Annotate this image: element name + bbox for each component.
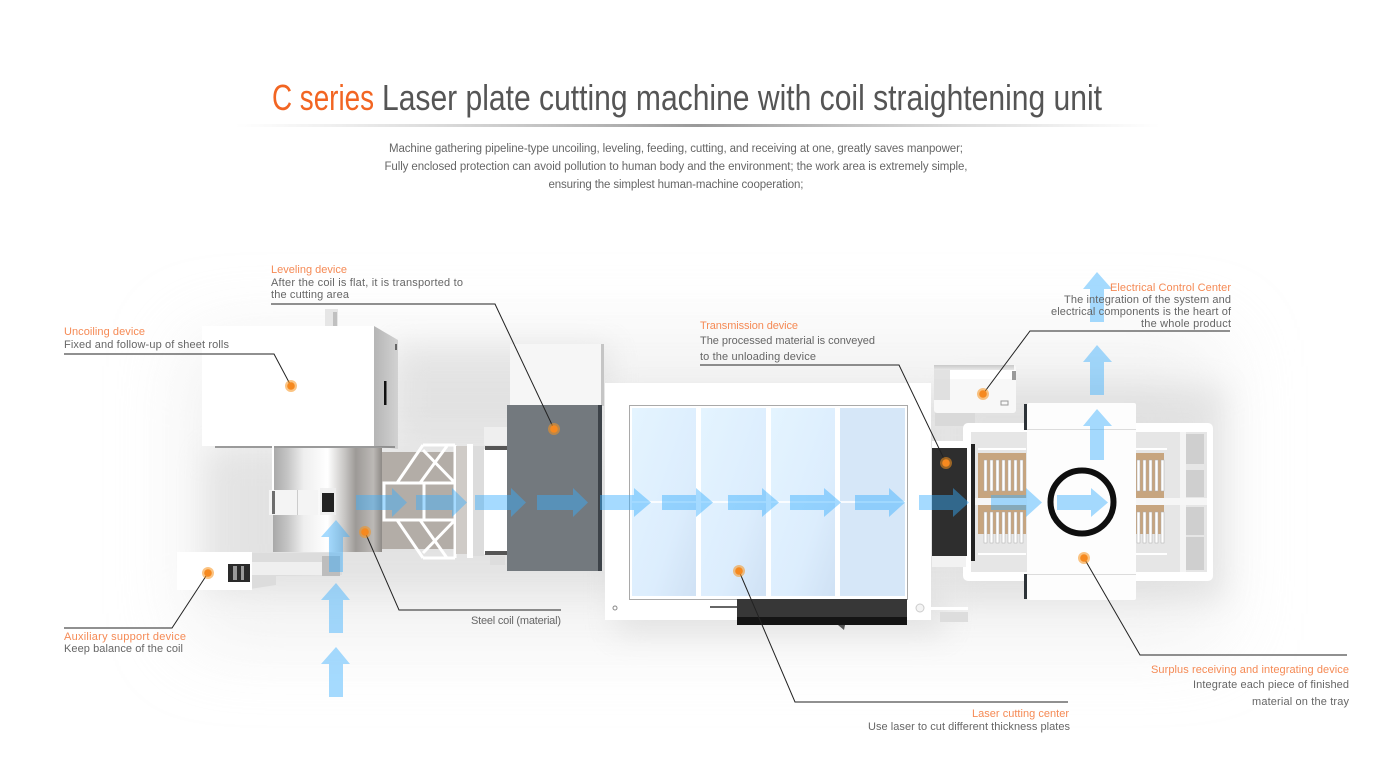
callout: electrical control center: The integration of the system and xyxy=(1064,294,1231,306)
callout: leveling device xyxy=(271,264,463,301)
feed rollers xyxy=(456,427,507,565)
callout: auxiliary support device: Keep balance of the coil xyxy=(64,643,183,655)
horizontal flow arrows xyxy=(356,488,1108,517)
auxiliary support xyxy=(177,552,342,590)
callout: leveling device: Leveling device xyxy=(271,264,347,276)
coil clamp xyxy=(269,446,336,515)
callout: electrical control center: Electrical Control Center xyxy=(1110,282,1231,294)
intro text: ensuring the simplest human-machine cooperation; xyxy=(548,179,804,191)
callout: uncoiling device xyxy=(64,326,230,351)
callout: leveling device: After the coil is flat, it is transported to xyxy=(271,277,463,289)
callout: laser cutting center: Laser cutting center xyxy=(972,708,1069,720)
callout: steel coil: Steel coil (material) xyxy=(471,615,561,627)
callout: leveling device: the cutting area xyxy=(271,289,350,301)
title: Laser plate cutting machine with coil straightening unit xyxy=(382,77,1102,118)
callout: uncoiling device: Uncoiling device xyxy=(64,326,145,338)
white slats xyxy=(984,460,1164,543)
surplus receiving cover xyxy=(1024,403,1136,600)
leveling device cover xyxy=(507,405,602,571)
vertical flow arrows: outfeed xyxy=(1083,272,1112,460)
leveling cover back panel xyxy=(510,344,604,406)
callout: surplus receiving: Integrate each piece of finished xyxy=(1193,679,1349,691)
steel coil xyxy=(273,448,382,552)
machine illustration xyxy=(177,309,1213,630)
callout: electrical control center xyxy=(1051,282,1232,330)
leader lines xyxy=(64,304,1347,702)
black ring xyxy=(1050,470,1114,534)
white truss frame xyxy=(384,445,455,558)
uncoiling housing xyxy=(202,326,398,449)
receiving frame xyxy=(963,423,1213,581)
callout: auxiliary support device xyxy=(64,631,186,655)
intro text: Machine gathering pipeline-type uncoiling, leveling, feeding, cutting, and receiving at one, greatly saves manpower; xyxy=(389,143,963,155)
callout: auxiliary support device: Auxiliary support device xyxy=(64,631,186,643)
callout: laser cutting center: Use laser to cut different thickness plates xyxy=(868,721,1070,733)
electrical control box xyxy=(934,365,1016,426)
callout: transmission device: Transmission device xyxy=(700,320,798,332)
callout: surplus receiving xyxy=(1151,664,1350,708)
soft background shadow xyxy=(190,340,1225,640)
brown backing behind frame xyxy=(380,452,456,549)
laser cutting center xyxy=(605,383,968,630)
callout: surplus receiving: material on the tray xyxy=(1252,696,1350,708)
callout: surplus receiving: Surplus receiving and integrating device xyxy=(1151,664,1349,676)
uncoiler top bracket xyxy=(325,309,338,326)
intro text xyxy=(384,143,968,191)
callout: transmission device: The processed material is conveyed xyxy=(700,335,875,347)
callout: laser cutting center xyxy=(868,708,1070,733)
intro text: Fully enclosed protection can avoid pollution to human body and the environment; the work area is extremely simple, xyxy=(384,161,968,173)
wood pallets xyxy=(978,453,1164,534)
callout: transmission device: to the unloading device xyxy=(700,351,816,363)
callout: electrical control center: electrical components is the heart of xyxy=(1051,306,1232,318)
callout: transmission device xyxy=(700,320,875,363)
callout: electrical control center: the whole product xyxy=(1141,318,1231,330)
title: C series xyxy=(272,77,374,118)
transmission device xyxy=(932,441,967,567)
vertical flow arrows: infeed xyxy=(321,520,350,697)
title rule xyxy=(235,124,1160,127)
callout: uncoiling device: Fixed and follow-up of sheet rolls xyxy=(64,339,230,351)
orange marker dots xyxy=(202,380,1090,579)
